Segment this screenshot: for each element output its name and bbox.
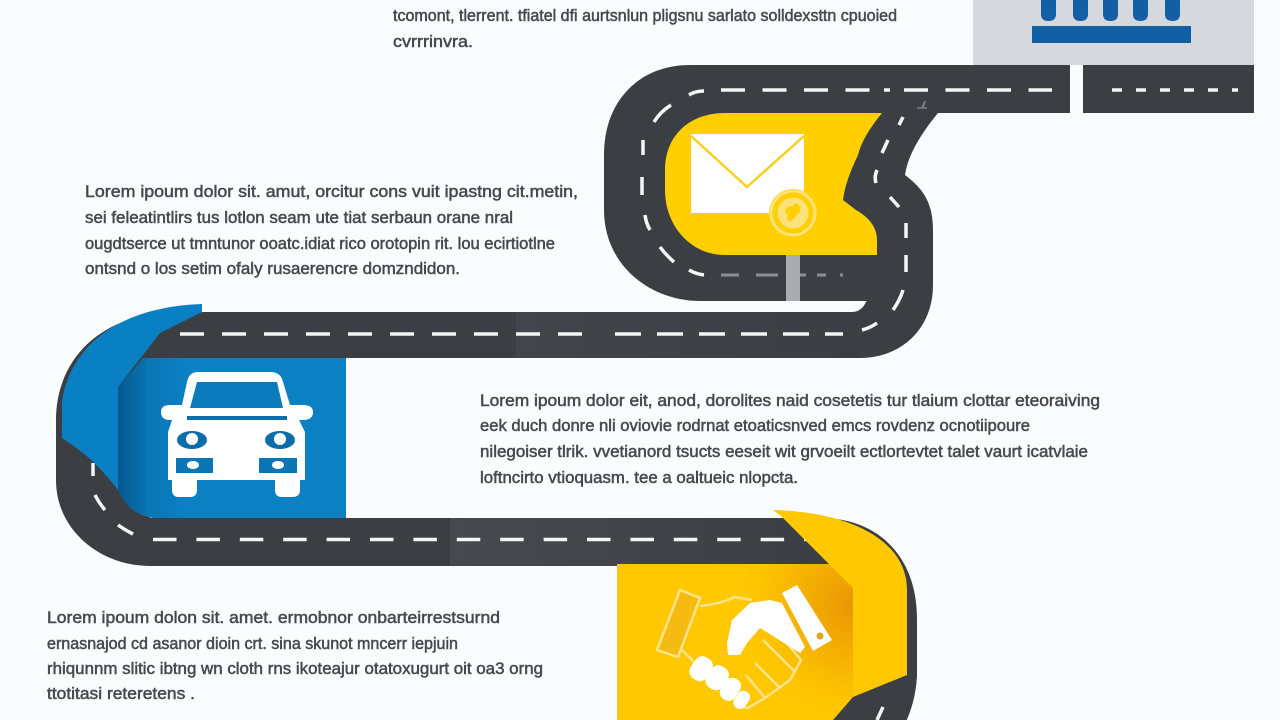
text block: mail: [85, 183, 578, 278]
text block: car: Lorem ipoum dolor eit, anod, dorolites naid cosetetis tur tlaium clottar eteoraiving: [480, 392, 1100, 410]
text block: car: nilegoiser tlrik. vvetianord tsucts eeseit wit grvoeilt ectlortevtet talet vaurt icatvlaie: [480, 443, 1088, 461]
orange shading: [617, 564, 853, 720]
text block: top: cvrrrinvra.: [393, 33, 473, 51]
icon: badge: [769, 189, 817, 237]
road: S-bend to middle lane: [500, 113, 938, 358]
road: left bend: [56, 312, 520, 566]
icon: car: [161, 372, 313, 497]
icon: handshake: [657, 585, 832, 711]
panel: building icon: [973, 0, 1254, 65]
road: lighter segment middle: [516, 312, 852, 358]
text block: mail: sei feleatintlirs tus lotlon seam ute tiat serbaun orane nral: [85, 209, 513, 227]
text block: top: [393, 7, 897, 51]
road: bottom right bend: [450, 518, 917, 720]
panel: car: [62, 304, 346, 518]
road artifact: [917, 101, 927, 108]
text block: car: loftncirto vtioquasm. tee a oaltueic nlopcta.: [480, 469, 798, 487]
text block: mail: ontsnd o los setim ofaly rusaerencre domzndidon.: [85, 260, 460, 278]
text block: top: tcomont, tlerrent. tfiatel dfi aurtsnlun pligsnu sarlato solldexsttn cpuoied: [393, 7, 897, 25]
text block: car: [480, 392, 1100, 487]
text block: handshake: Lorem ipoum dolon sit. amet. ermobnor onbarteirrestsurnd: [47, 609, 500, 627]
panel: handshake: [617, 510, 907, 720]
text block: car: eek duch donre nli oviovie rodrnat etoaticsnved emcs rovdenz ocnotiipoure: [480, 417, 1030, 435]
text block: handshake: [47, 609, 543, 703]
panel: mail: [665, 101, 927, 301]
faded lane markings: [721, 274, 843, 276]
text block: mail: Lorem ipoum dolor sit. amut, orcitur cons vuit ipastng cit.metin,: [85, 183, 578, 201]
lane markings: middle road: [180, 117, 906, 334]
road: top and mail loop: [604, 65, 1254, 301]
icon: building columns: [1032, 0, 1191, 43]
text block: mail: ougdtserce ut tmntunor ooatc.idiat rico orotopin rit. lou ecirtiotlne: [85, 235, 555, 253]
text block: handshake: ernasnajod cd asanor dioin crt. sina skunot mncerr iepjuin: [47, 635, 458, 653]
signpost: [786, 255, 800, 301]
icon: envelope: [691, 134, 804, 213]
flap: yellow: [773, 510, 907, 697]
flap: blue: [62, 304, 202, 490]
lane markings: bottom road: [93, 463, 826, 540]
text block: handshake: ttotitasi reteretens .: [47, 685, 195, 703]
text block: handshake: rhiqunnm slitic ibtng wn cloth rns ikoteajur otatoxugurt oit oa3 orng: [47, 660, 543, 678]
